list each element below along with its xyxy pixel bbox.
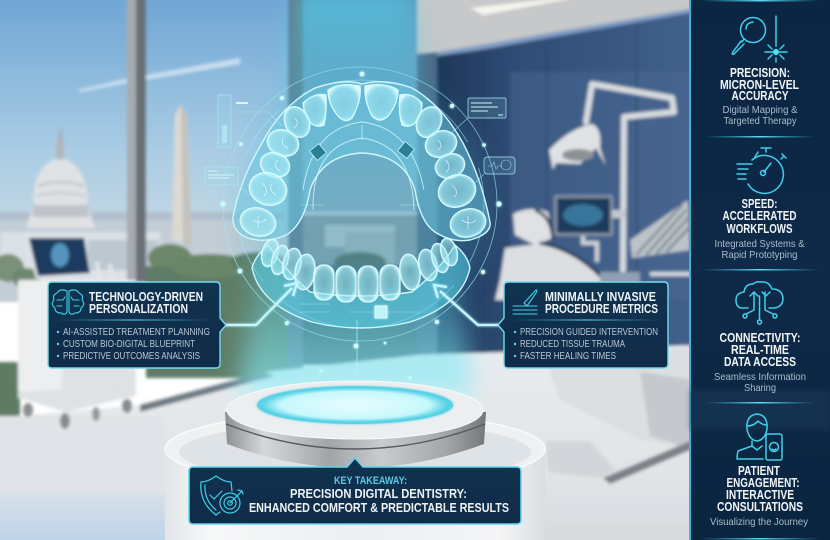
takeaway text: KEY TAKEAWAY: [334,475,407,487]
section text: CONSULTATIONS [717,500,803,514]
panel heading: PERSONALIZATION [89,302,188,316]
lower dental chair [546,345,695,484]
hologram light beam [238,0,475,395]
icon: person with tablet [737,414,782,460]
panel bullets: REDUCED TISSUE TRAUMA [520,338,625,350]
left cart [18,280,136,429]
upper teeth [237,85,489,241]
pedestal [165,381,545,540]
section text: ACCELERATED [722,209,796,223]
panel: minimally invasive procedure metrics [498,282,668,368]
panel bullets: AI-ASSISTED TREATMENT PLANNING [63,326,210,338]
section text: CONNECTIVITY: [720,331,800,345]
takeaway text: ENHANCED COMFORT & PREDICTABLE RESULTS [249,500,509,515]
section text: DATA ACCESS [724,355,796,369]
glowing disc [257,386,453,424]
circuit chips [310,142,414,160]
ceiling light [470,0,575,15]
icon: brain [52,290,84,314]
white disc [227,381,483,439]
arrow: right panel to lower teeth [434,285,502,325]
panel heading [89,290,203,316]
lower gum [252,245,470,328]
lower circuit chip [300,304,420,382]
section text [714,331,806,394]
sidebar background [690,0,830,540]
panel: key takeaway [189,458,521,524]
HUD label: left card [205,167,250,195]
panel frame [48,282,226,368]
small tablet with tooth [25,236,112,282]
HUD label: right card [448,98,506,136]
section: speed [714,148,804,261]
upper gum [233,82,490,241]
hologram: dental arches [205,67,515,382]
floor [0,345,695,540]
dental lamp arm [586,84,674,270]
section: patient engagement [710,414,809,528]
section text: SPEED: [742,197,778,211]
capitol dome [26,130,95,228]
panel bullets: FASTER HEALING TIMES [520,350,616,362]
right wall [437,0,695,380]
arch glow backdrop [230,75,490,335]
HUD label: left gauge [218,95,282,147]
icon: stopwatch [737,148,786,193]
window sky centre [300,0,420,300]
trees [0,244,418,418]
section text: INTERACTIVE [726,488,794,502]
metal base [225,412,486,468]
panel heading: TECHNOLOGY-DRIVEN [89,290,203,304]
panel bullets: PRECISION GUIDED INTERVENTION [520,326,658,338]
section text [720,66,799,127]
takeaway text: PRECISION DIGITAL DENTISTRY: [290,486,467,501]
section text: ENGAGEMENT: [726,476,800,490]
clouds [78,58,240,92]
icon: scalpel on tissue [513,290,537,314]
panel bullets: CUSTOM BIO-DIGITAL BLUEPRINT [63,338,195,350]
dental lamp head [549,124,606,170]
icon: magnifier and laser [732,16,787,62]
icon: shield and target [201,476,243,515]
panel: technology-driven personalization [48,282,226,368]
section text: Visualizing the Journey [710,516,809,528]
window sky left [0,0,305,300]
section text: MICRON-LEVEL [720,78,799,92]
panel heading: MINIMALLY INVASIVE [545,290,656,304]
section: precision [720,16,799,127]
section text: Targeted Therapy [724,115,797,127]
lower teeth [259,236,460,302]
ring guides [223,67,497,341]
monument [172,105,192,246]
section text: Integrated Systems & [714,238,804,250]
section: connectivity [714,282,806,394]
dental monitor [554,195,626,262]
takeaway text [249,475,509,515]
arrow: left panel to lower teeth [222,283,297,325]
panel heading: PROCEDURE METRICS [545,302,658,316]
panel frame [498,282,668,368]
inner arch circuit [303,122,424,210]
section text: Seamless Information [714,371,806,383]
panel bullets [514,326,658,362]
section text: WORKFLOWS [726,222,792,236]
panel heading [545,290,658,316]
icon: cloud network [736,282,783,324]
panel frame [189,458,521,524]
panel: right sidebar [689,0,830,540]
section text [714,197,804,261]
dental tray arm [630,200,692,276]
panel bullets: PREDICTIVE OUTCOMES ANALYSIS [63,350,200,362]
skyline buildings [0,212,425,302]
section text [710,464,809,528]
section text: REAL-TIME [731,343,789,357]
ceiling [417,0,695,54]
HUD label: right pulse [472,157,515,186]
window mullions [127,0,136,282]
section text: Rapid Prototyping [722,249,798,261]
hologram nodes [221,72,502,379]
section text: ACCURACY [732,89,789,103]
dental chair [495,209,640,302]
section text: PATIENT [738,464,780,478]
section text: PRECISION: [730,66,790,80]
panel bullets [57,326,210,362]
cylinder [165,450,545,540]
section text: Sharing [744,382,776,394]
section text: Digital Mapping & [722,104,798,116]
